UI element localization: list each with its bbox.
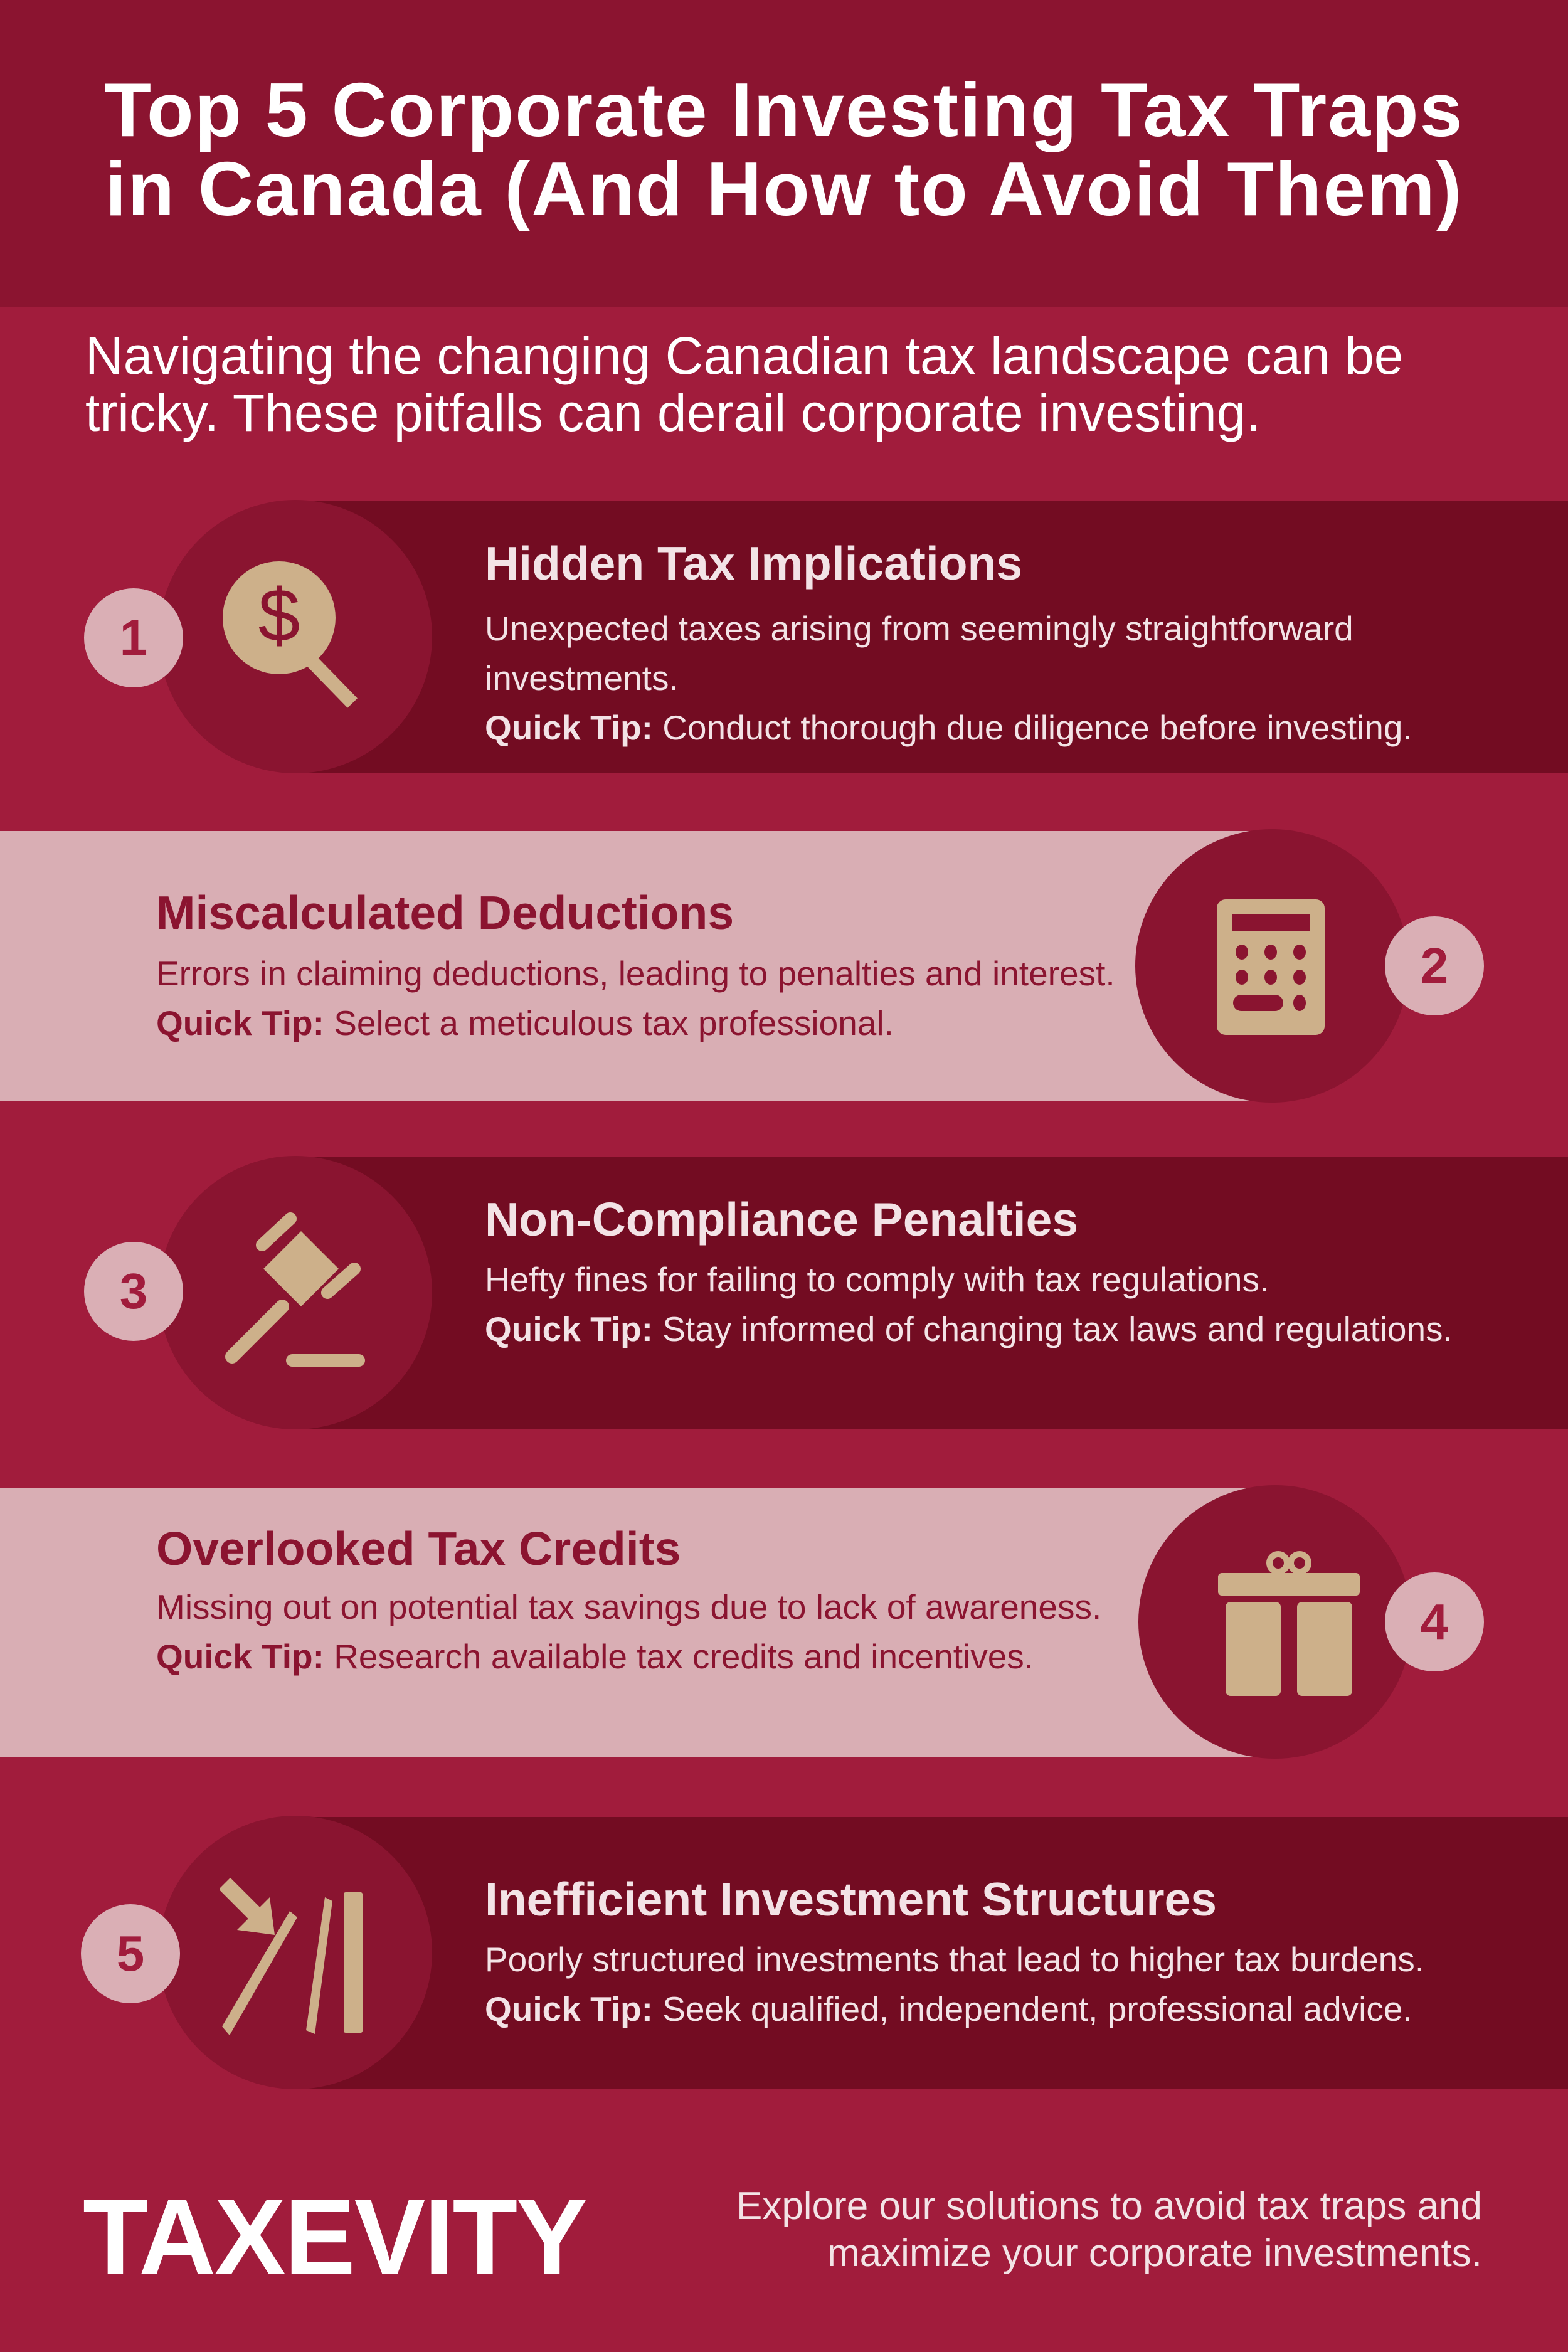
- intro text: Navigating the changing Canadian tax landscape can be: [85, 326, 1404, 385]
- number 1: 1: [120, 610, 147, 665]
- heading: Inefficient Investment Structures: [485, 1873, 1217, 1926]
- number 3: [84, 1242, 183, 1341]
- number 4: [1385, 1572, 1484, 1671]
- panel 2: [0, 829, 1484, 1103]
- icon: gavel: [225, 1212, 365, 1367]
- title: [104, 67, 1464, 231]
- text: Poorly structured investments that lead to higher tax burdens.: [485, 1940, 1424, 1979]
- text: Errors in claiming deductions, leading to penalties and interest.: [156, 954, 1115, 993]
- header band: [0, 0, 1568, 307]
- icon: arrow and bars: [220, 1878, 363, 2035]
- text: Quick Tip: Select a meticulous tax professional.: [156, 1004, 894, 1042]
- text: Quick Tip: Seek qualified, independent, professional advice.: [485, 1989, 1412, 2028]
- intro text: [85, 326, 1404, 442]
- heading: Miscalculated Deductions: [156, 886, 734, 939]
- text: Quick Tip: Conduct thorough due diligence before investing.: [485, 708, 1412, 747]
- panel 3: [84, 1156, 1568, 1429]
- title: Top 5 Corporate Investing Tax Traps: [104, 67, 1464, 152]
- number 2: [1385, 916, 1484, 1015]
- text: [485, 609, 1412, 747]
- footer call to action: Explore our solutions to avoid tax traps and: [736, 2185, 1482, 2228]
- text: [156, 1587, 1101, 1676]
- text: [485, 1260, 1453, 1348]
- panel 1: [84, 500, 1568, 773]
- number 2: 2: [1421, 938, 1448, 993]
- intro text: tricky. These pitfalls can derail corporate investing.: [85, 383, 1261, 442]
- number 4: 4: [1421, 1594, 1448, 1650]
- icon: calculator: [1217, 899, 1325, 1035]
- heading: Overlooked Tax Credits: [156, 1522, 681, 1575]
- text: Missing out on potential tax savings due to lack of awareness.: [156, 1587, 1101, 1626]
- heading: Hidden Tax Implications: [485, 537, 1022, 590]
- footer call to action: maximize your corporate investments.: [827, 2232, 1482, 2275]
- icon: magnifier dollar: [223, 561, 358, 708]
- icon: gift: [1218, 1551, 1360, 1696]
- number 5: [81, 1904, 180, 2003]
- logo: TAXEVITY: [83, 2178, 586, 2297]
- footer call to action: [736, 2185, 1482, 2275]
- number 5: 5: [117, 1926, 144, 1981]
- text: Unexpected taxes arising from seemingly straightforward: [485, 609, 1353, 648]
- number 3: 3: [120, 1263, 147, 1319]
- panel 5: [81, 1816, 1568, 2089]
- text: Hefty fines for failing to comply with tax regulations.: [485, 1260, 1269, 1299]
- text: [156, 954, 1115, 1042]
- title: in Canada (And How to Avoid Them): [105, 146, 1463, 231]
- number 1: [84, 588, 183, 687]
- icon: magnifier dollar: $: [258, 573, 300, 657]
- panel 4: [0, 1485, 1484, 1759]
- text: investments.: [485, 659, 679, 697]
- text: [485, 1940, 1424, 2028]
- text: Quick Tip: Stay informed of changing tax laws and regulations.: [485, 1310, 1453, 1348]
- heading: Non-Compliance Penalties: [485, 1193, 1078, 1246]
- text: Quick Tip: Research available tax credits and incentives.: [156, 1637, 1034, 1676]
